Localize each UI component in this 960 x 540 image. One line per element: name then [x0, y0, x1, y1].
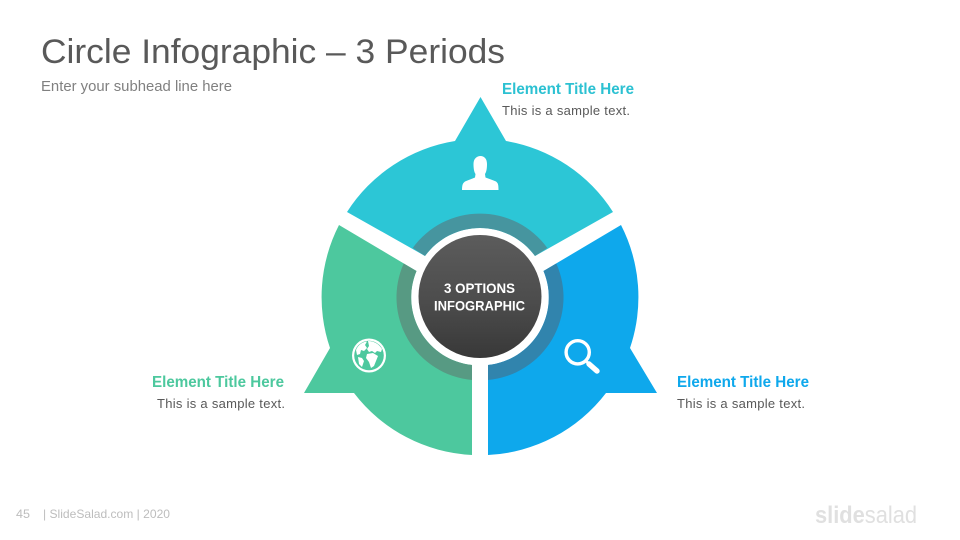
- subhead: Enter your subhead line here: [41, 79, 232, 95]
- icon: globe: [352, 338, 386, 372]
- icon: magnifier: [566, 341, 597, 371]
- callout: blue: Element Title Here: [677, 374, 809, 391]
- panel: teal segment: [347, 97, 613, 256]
- icon: person: [462, 156, 498, 190]
- footer: 45: [16, 507, 30, 521]
- callout: blue: This is a sample text.: [677, 396, 805, 411]
- callout: teal: Element Title Here: [502, 81, 634, 98]
- callout: teal: [502, 81, 634, 118]
- center hub: [418, 235, 542, 358]
- callout: teal: This is a sample text.: [502, 103, 630, 118]
- footer: | SlideSalad.com | 2020: [43, 507, 170, 521]
- callout: green: [152, 374, 285, 411]
- hub label: INFOGRAPHIC: [434, 298, 525, 314]
- panel: green segment: [304, 225, 472, 455]
- title: Circle Infographic – 3 Periods: [41, 33, 505, 71]
- hub label: 3 OPTIONS: [444, 280, 515, 296]
- callout: green: Element Title Here: [152, 374, 284, 391]
- logo: slidesalad: [815, 502, 917, 529]
- panel: blue segment: [488, 225, 657, 455]
- callout: blue: [677, 374, 809, 411]
- hub label: [434, 280, 525, 314]
- callout: green: This is a sample text.: [157, 396, 285, 411]
